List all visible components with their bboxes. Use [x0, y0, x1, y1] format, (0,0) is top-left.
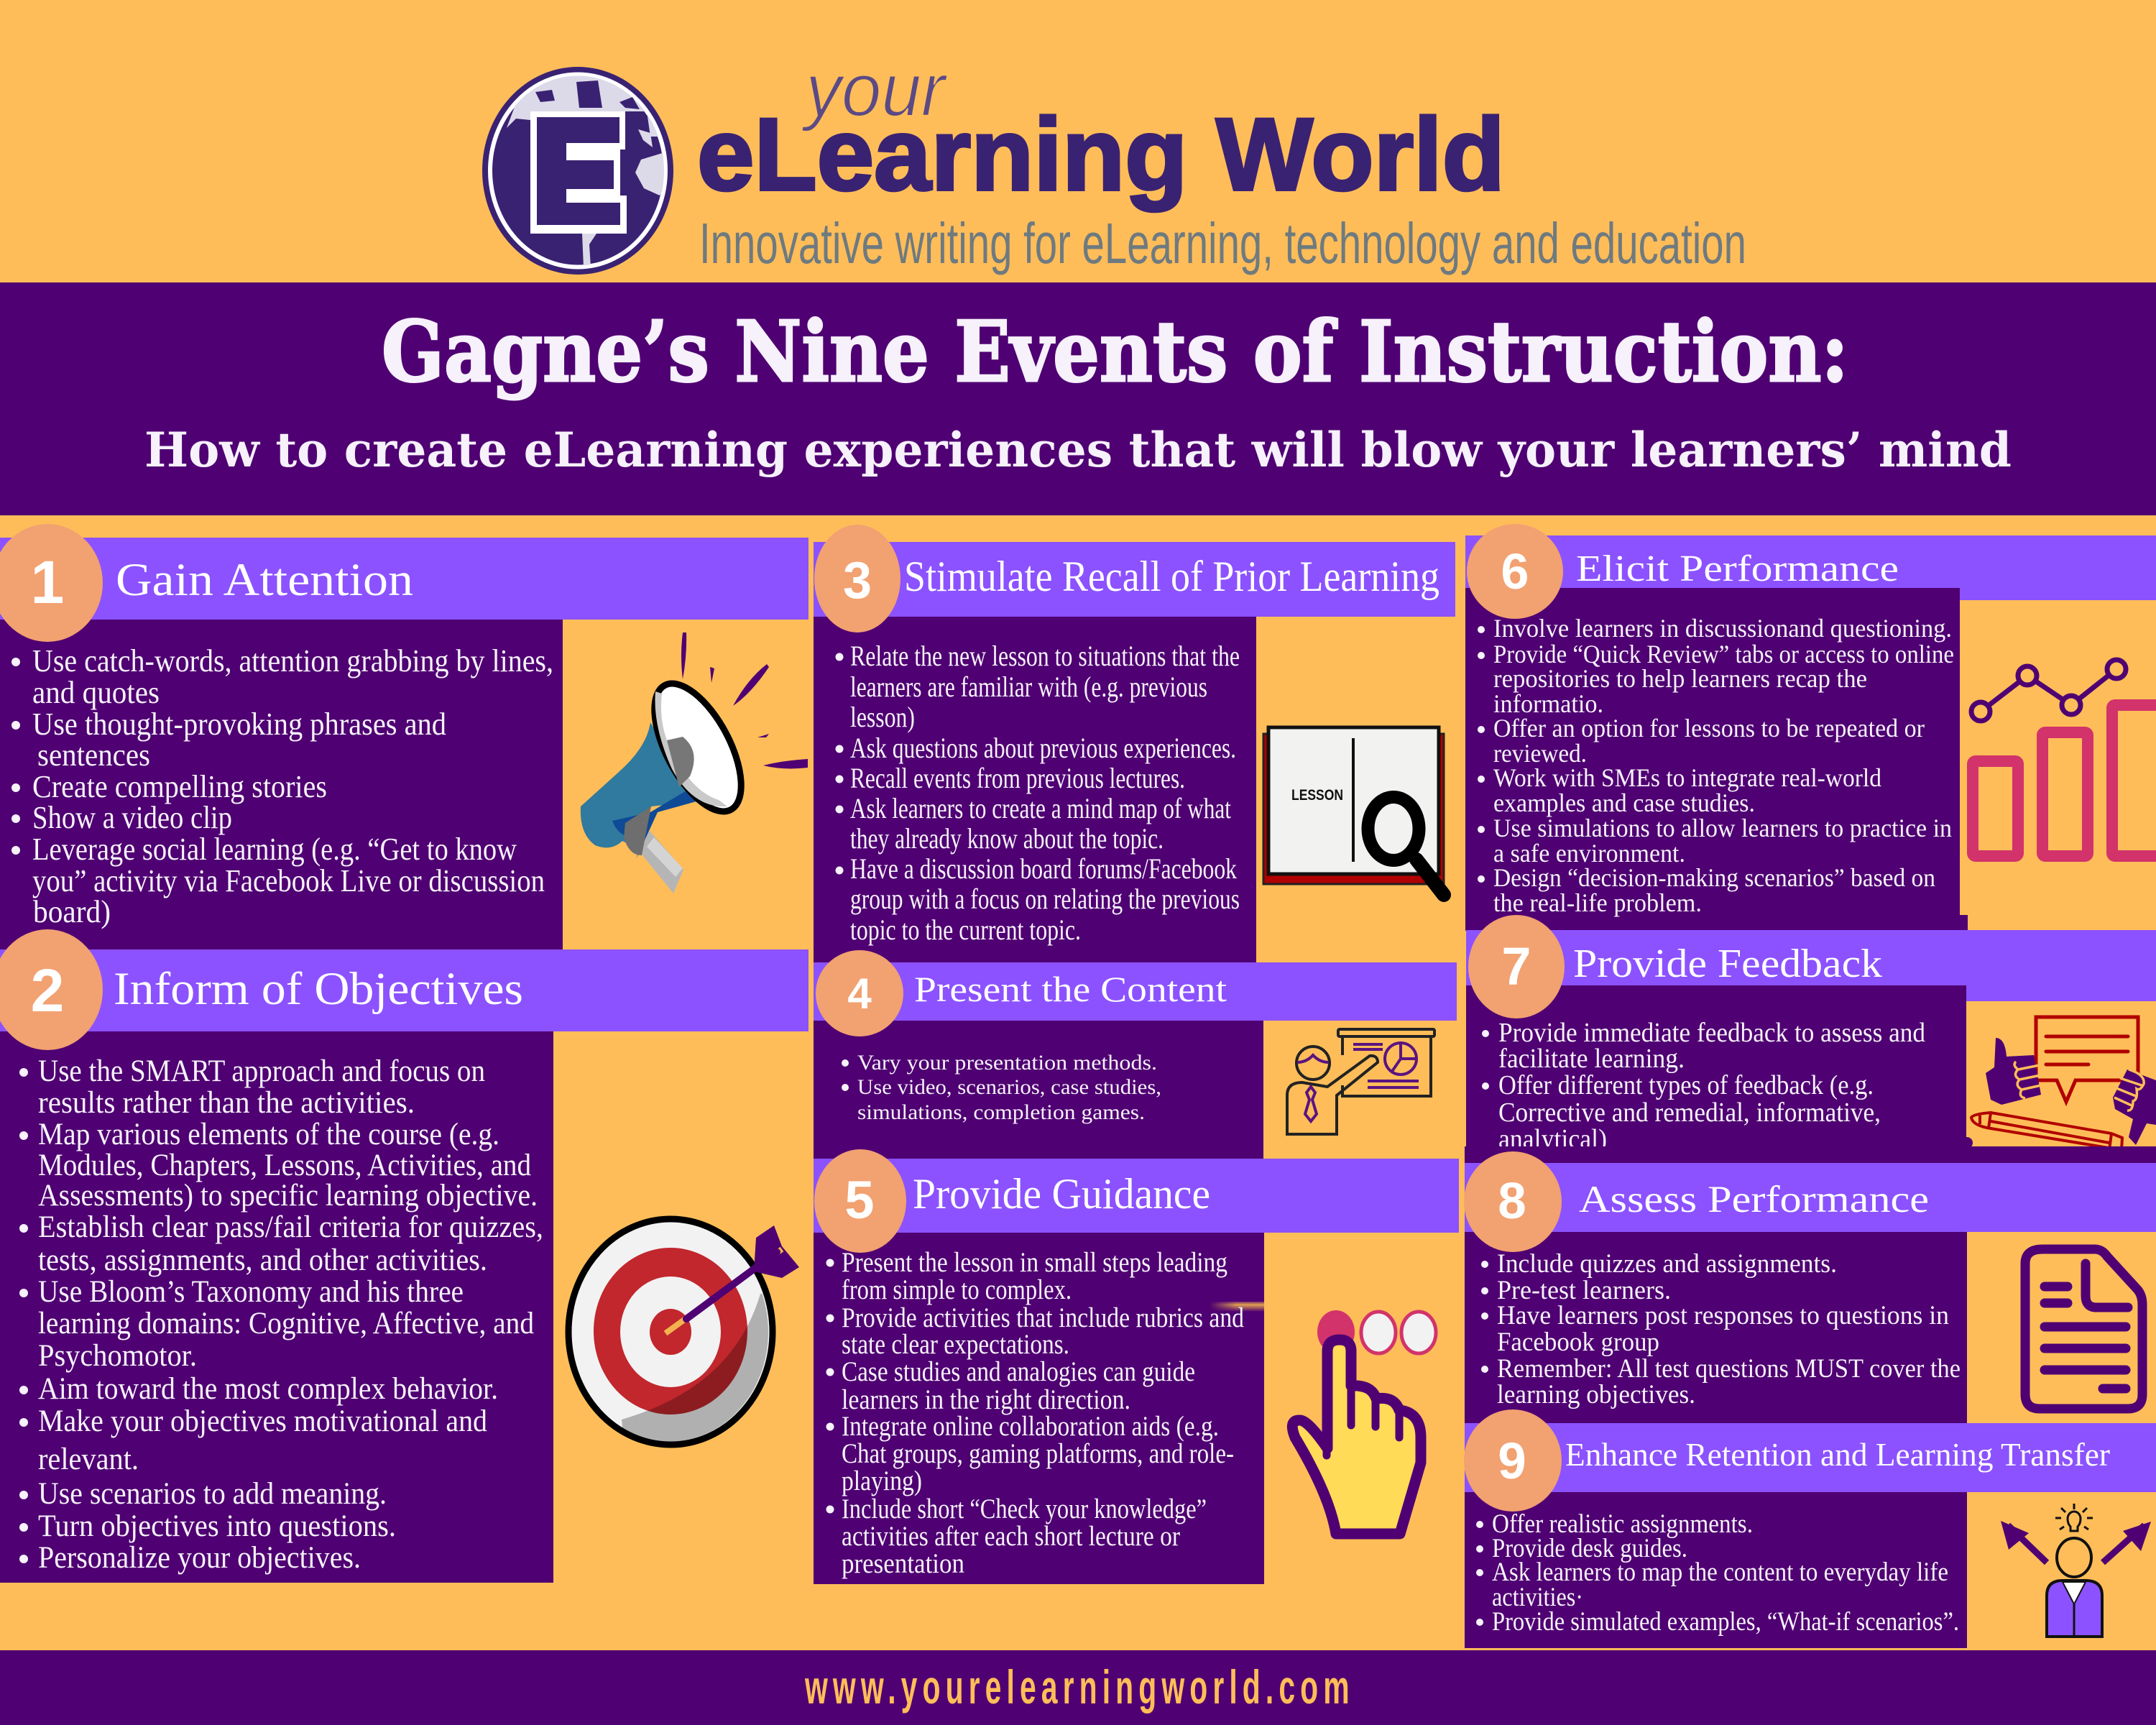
footer band	[0, 1650, 2156, 1725]
panel 6 header bar	[1465, 535, 2156, 600]
panel 3 bullet list: Ask questions about previous experiences.	[850, 732, 1236, 764]
panel 6 bullet list: Offer an option for lessons to be repeated or	[1493, 714, 1925, 742]
panel 9 body	[1465, 1492, 1967, 1648]
panel 1 badge	[0, 524, 103, 642]
icon: document	[2025, 1249, 2142, 1409]
panel 5 bullet list: state clear expectations.	[842, 1329, 1069, 1360]
panel 3 bullet list: group with a focus on relating the previous	[850, 883, 1240, 915]
panel 2: inform of objectives	[0, 929, 808, 1583]
panel 3 bullet list: they already know about the topic.	[850, 822, 1164, 855]
panel 1 body	[0, 620, 563, 949]
panel 1 bullet list: Leverage social learning (e.g. “Get to know	[32, 832, 517, 867]
panel 6 heading: Elicit Performance	[1576, 548, 1899, 589]
panel 2 bullet list: Use the SMART approach and focus on	[38, 1054, 485, 1088]
panel 8 body	[1465, 1232, 1967, 1423]
panel 5 badge: 5	[844, 1170, 875, 1230]
panel 3 heading: Stimulate Recall of Prior Learning	[904, 553, 1439, 600]
panel 9 bullet list: Ask learners to map the content to everyday life	[1492, 1558, 1948, 1587]
panel 5 bullet list: activities after each short lecture or	[842, 1521, 1180, 1552]
panel 8: assess performance	[1464, 1151, 2156, 1423]
panel 7: provide feedback	[1465, 915, 2156, 1163]
panel 9 bullet list	[1476, 1509, 1959, 1637]
panel 7 header bar	[1466, 930, 2156, 1001]
panel 7 bullet list: facilitate learning.	[1498, 1044, 1685, 1074]
logo: your eLearning World	[482, 48, 1746, 275]
panel 5 badge	[814, 1149, 906, 1253]
panel 6 bullet list: Involve learners in discussionand questioning.	[1493, 614, 1952, 643]
panel 2 bullet list: Personalize your objectives.	[38, 1541, 361, 1575]
panel 2 body	[0, 1031, 553, 1583]
panel 1 bullet list	[11, 643, 553, 929]
panel 5 bullet list: Include short “Check your knowledge”	[842, 1494, 1207, 1524]
panel 6 bullet list: Provide “Quick Review” tabs or access to online	[1493, 640, 1954, 668]
panel 6 badge: 6	[1501, 543, 1529, 599]
panel 6: elicit performance	[1465, 524, 2156, 931]
panel 2 bullet list: tests, assignments, and other activities.	[38, 1243, 487, 1277]
panel 9 bullet list: activities·	[1492, 1583, 1583, 1612]
panel 1 bullet list: sentences	[37, 737, 150, 773]
panel 7 badge: 7	[1501, 937, 1531, 996]
panel 2 badge: 2	[31, 957, 64, 1024]
panel 1 bullet list: you” activity via Facebook Live or discussion	[32, 863, 545, 898]
panel 2 bullet list: Establish clear pass/fail criteria for quizzes,	[38, 1210, 543, 1244]
panel 3 bullet list: Ask learners to create a mind map of what	[850, 792, 1231, 824]
panel 5 bullet list: Chat groups, gaming platforms, and role-	[842, 1438, 1234, 1469]
panel 3 badge: 3	[843, 552, 872, 610]
panel 5 bullet list: Case studies and analogies can guide	[842, 1356, 1195, 1387]
panel 1 bullet list: board)	[33, 894, 111, 929]
panel 9 bullet list: Provide desk guides.	[1492, 1534, 1687, 1563]
main title: Gagne’s Nine Events of Instruction:	[382, 303, 1848, 401]
panel 7 bullet list: analytical)	[1498, 1124, 1607, 1154]
panel 4 bullet list: Use video, scenarios, case studies,	[857, 1075, 1161, 1099]
panel 9 bullet list: Offer realistic assignments.	[1492, 1509, 1753, 1539]
panel 4 body	[814, 1021, 1263, 1159]
panel 1 heading: Gain Attention	[116, 554, 413, 606]
panel 2 bullet list: relevant.	[38, 1443, 139, 1476]
panel 2 bullet list: Make your objectives motivational and	[38, 1404, 487, 1438]
panel 7 bullet list: Offer different types of feedback (e.g.	[1498, 1070, 1874, 1100]
panel 5 bullet list: Integrate online collaboration aids (e.g.	[842, 1411, 1219, 1442]
panel 4 badge: 4	[847, 970, 872, 1018]
panel 1 bullet list: Use thought-provoking phrases and	[32, 707, 446, 742]
panel 8 heading: Assess Performance	[1579, 1179, 1929, 1220]
panel 6 bullet list: informatio.	[1493, 689, 1603, 718]
panel 5 bullet list: playing)	[842, 1466, 922, 1496]
panel 2 bullet list	[19, 1054, 543, 1575]
icon: pointing hand with dots	[1292, 1310, 1436, 1534]
panel 8 bullet list	[1481, 1249, 1961, 1409]
panel 6 bullet list: Design “decision-making scenarios” based on	[1493, 863, 1935, 892]
panel 5 bullet list: Present the lesson in small steps leading	[842, 1247, 1227, 1278]
panel 1 header bar	[0, 538, 808, 620]
subtitle: How to create eLearning experiences that will blow your learners’ mind	[144, 422, 2012, 478]
panel 6 body	[1465, 588, 1968, 931]
panel 3 badge	[814, 525, 900, 632]
panel 6 bullet list: Work with SMEs to integrate real-world	[1493, 763, 1881, 792]
panel 2 bullet list: learning domains: Cognitive, Affective, and	[38, 1307, 534, 1340]
panel 2 badge	[0, 929, 103, 1050]
panel 9 bullet list: Provide simulated examples, “What-if scenarios”.	[1492, 1607, 1959, 1637]
icon: target with dart	[568, 1219, 799, 1459]
panel 2 bullet list: results rather than the activities.	[38, 1086, 415, 1120]
panel 2 bullet list: Modules, Chapters, Lessons, Activities, and	[38, 1149, 531, 1182]
panel 5 header bar	[814, 1159, 1459, 1233]
logo tagline: Innovative writing for eLearning, technology and education	[699, 211, 1746, 275]
panel 3 bullet list: topic to the current topic.	[850, 914, 1081, 946]
panel 2 header bar	[0, 949, 808, 1031]
icon: feedback bubble, thumbs and pencil	[1971, 1017, 2156, 1150]
panel 7 bullet list	[1482, 1018, 1925, 1154]
panel 2 bullet list: Use Bloom’s Taxonomy and his three	[38, 1275, 464, 1309]
panel 3 bullet list: lesson)	[850, 701, 915, 733]
panel 4 badge	[816, 950, 903, 1036]
panel 3 bullet list: Relate the new lesson to situations that the	[850, 640, 1240, 672]
panel 2 bullet list: Turn objectives into questions.	[38, 1509, 396, 1543]
logo word: your: your	[801, 48, 948, 132]
panel 9 badge	[1464, 1409, 1562, 1512]
panel 3 bullet list: Have a discussion board forums/Facebook	[850, 852, 1237, 885]
icon: bar and line chart	[1971, 660, 2156, 856]
panel 5 body	[814, 1233, 1264, 1584]
panel 1 bullet list: Create compelling stories	[32, 769, 327, 804]
panel 8 header bar	[1465, 1163, 2156, 1232]
panel 7 body	[1466, 985, 1966, 1146]
panel 1 bullet list: Show a video clip	[32, 800, 232, 835]
panel 8 badge: 8	[1498, 1173, 1526, 1230]
panel 6 bullet list: reviewed.	[1493, 739, 1587, 768]
icon: presenter at board	[1287, 1029, 1434, 1134]
panel 5 bullet list: presentation	[842, 1548, 964, 1579]
panel 9 heading: Enhance Retention and Learning Transfer	[1565, 1436, 2110, 1473]
panel 3: stimulate recall	[814, 525, 1455, 962]
panel 8 bullet list: learning objectives.	[1497, 1380, 1695, 1409]
panel 6 badge	[1467, 524, 1563, 619]
panel 4 header bar	[814, 962, 1457, 1021]
panel 1 bullet list: and quotes	[32, 675, 160, 710]
panel 7 badge	[1468, 915, 1565, 1018]
panel 1 badge: 1	[31, 548, 64, 616]
panel 1 bullet list: Use catch-words, attention grabbing by lines,	[32, 643, 553, 678]
panel 8 bullet list: Include quizzes and assignments.	[1497, 1249, 1837, 1279]
panel 8 bullet list: Have learners post responses to questions in	[1497, 1301, 1949, 1330]
panel 8 badge	[1464, 1151, 1562, 1252]
panel 3 bullet list: learners are familiar with (e.g. previous	[850, 671, 1207, 703]
panel 2 bullet list: Aim toward the most complex behavior.	[38, 1372, 498, 1406]
logo word: eLearning World: eLearning World	[697, 98, 1505, 212]
panel 4: present the content	[814, 950, 1457, 1159]
title band	[0, 282, 2156, 515]
panel 6 bullet list: Use simulations to allow learners to practice in	[1493, 814, 1952, 842]
panel 6 bullet list: the real-life problem.	[1493, 888, 1702, 917]
panel 3 bullet list	[835, 640, 1240, 946]
footer url: www.yourelearningworld.com	[804, 1660, 1350, 1714]
panel 5 bullet list: learners in the right direction.	[842, 1384, 1130, 1415]
panel 6 bullet list: a safe environment.	[1493, 839, 1685, 868]
panel 9 header bar	[1465, 1423, 2156, 1492]
panel 4 bullet list: simulations, completion games.	[857, 1100, 1145, 1124]
band under panel 7	[1465, 1146, 2156, 1163]
panel 8 bullet list: Facebook group	[1497, 1328, 1659, 1357]
panel 2 bullet list: Map various elements of the course (e.g.	[38, 1118, 499, 1151]
icon: megaphone	[581, 632, 808, 893]
panel 4 bullet list	[842, 1051, 1161, 1124]
icon: lesson book with magnifier	[1263, 727, 1444, 895]
panel 1: gain attention	[0, 524, 808, 949]
panel 7 bullet list: Corrective and remedial, informative,	[1498, 1098, 1881, 1128]
icon: person with idea and arrows	[2001, 1504, 2151, 1637]
panel 8 bullet list: Pre-test learners.	[1497, 1276, 1671, 1305]
panel 7 heading: Provide Feedback	[1573, 942, 1882, 986]
panel 7 bullet list: Provide immediate feedback to assess and	[1498, 1018, 1925, 1048]
panel 4 bullet list: Vary your presentation methods.	[857, 1051, 1157, 1075]
panel 3 body	[814, 617, 1256, 962]
logo globe icon	[482, 67, 673, 275]
panel 2 bullet list: Assessments) to specific learning objective.	[38, 1179, 538, 1213]
panel 5 bullet list: Provide activities that include rubrics and	[842, 1302, 1244, 1333]
panel 2 bullet list: Use scenarios to add meaning.	[38, 1477, 387, 1511]
book label: LESSON	[1291, 787, 1343, 804]
panel 6 bullet list	[1478, 614, 1954, 917]
panel 4 heading: Present the Content	[914, 969, 1227, 1009]
panel 8 bullet list: Remember: All test questions MUST cover the	[1497, 1354, 1961, 1384]
panel 2 bullet list: Psychomotor.	[38, 1339, 197, 1373]
panel 9 badge: 9	[1498, 1433, 1526, 1490]
panel 5 bullet list	[826, 1247, 1244, 1579]
panel 3 bullet list: Recall events from previous lectures.	[850, 762, 1185, 794]
panel 5: provide guidance	[814, 1149, 1459, 1584]
panel 2 heading: Inform of Objectives	[114, 963, 523, 1015]
panel 6 bullet list: repositories to help learners recap the	[1493, 664, 1867, 693]
panel 6 bullet list: examples and case studies.	[1493, 788, 1755, 817]
panel 9: enhance retention	[1464, 1409, 2156, 1648]
panel 5 heading: Provide Guidance	[913, 1170, 1210, 1218]
panel 3 header bar	[814, 542, 1455, 617]
panel 5 bullet list: from simple to complex.	[842, 1274, 1072, 1305]
